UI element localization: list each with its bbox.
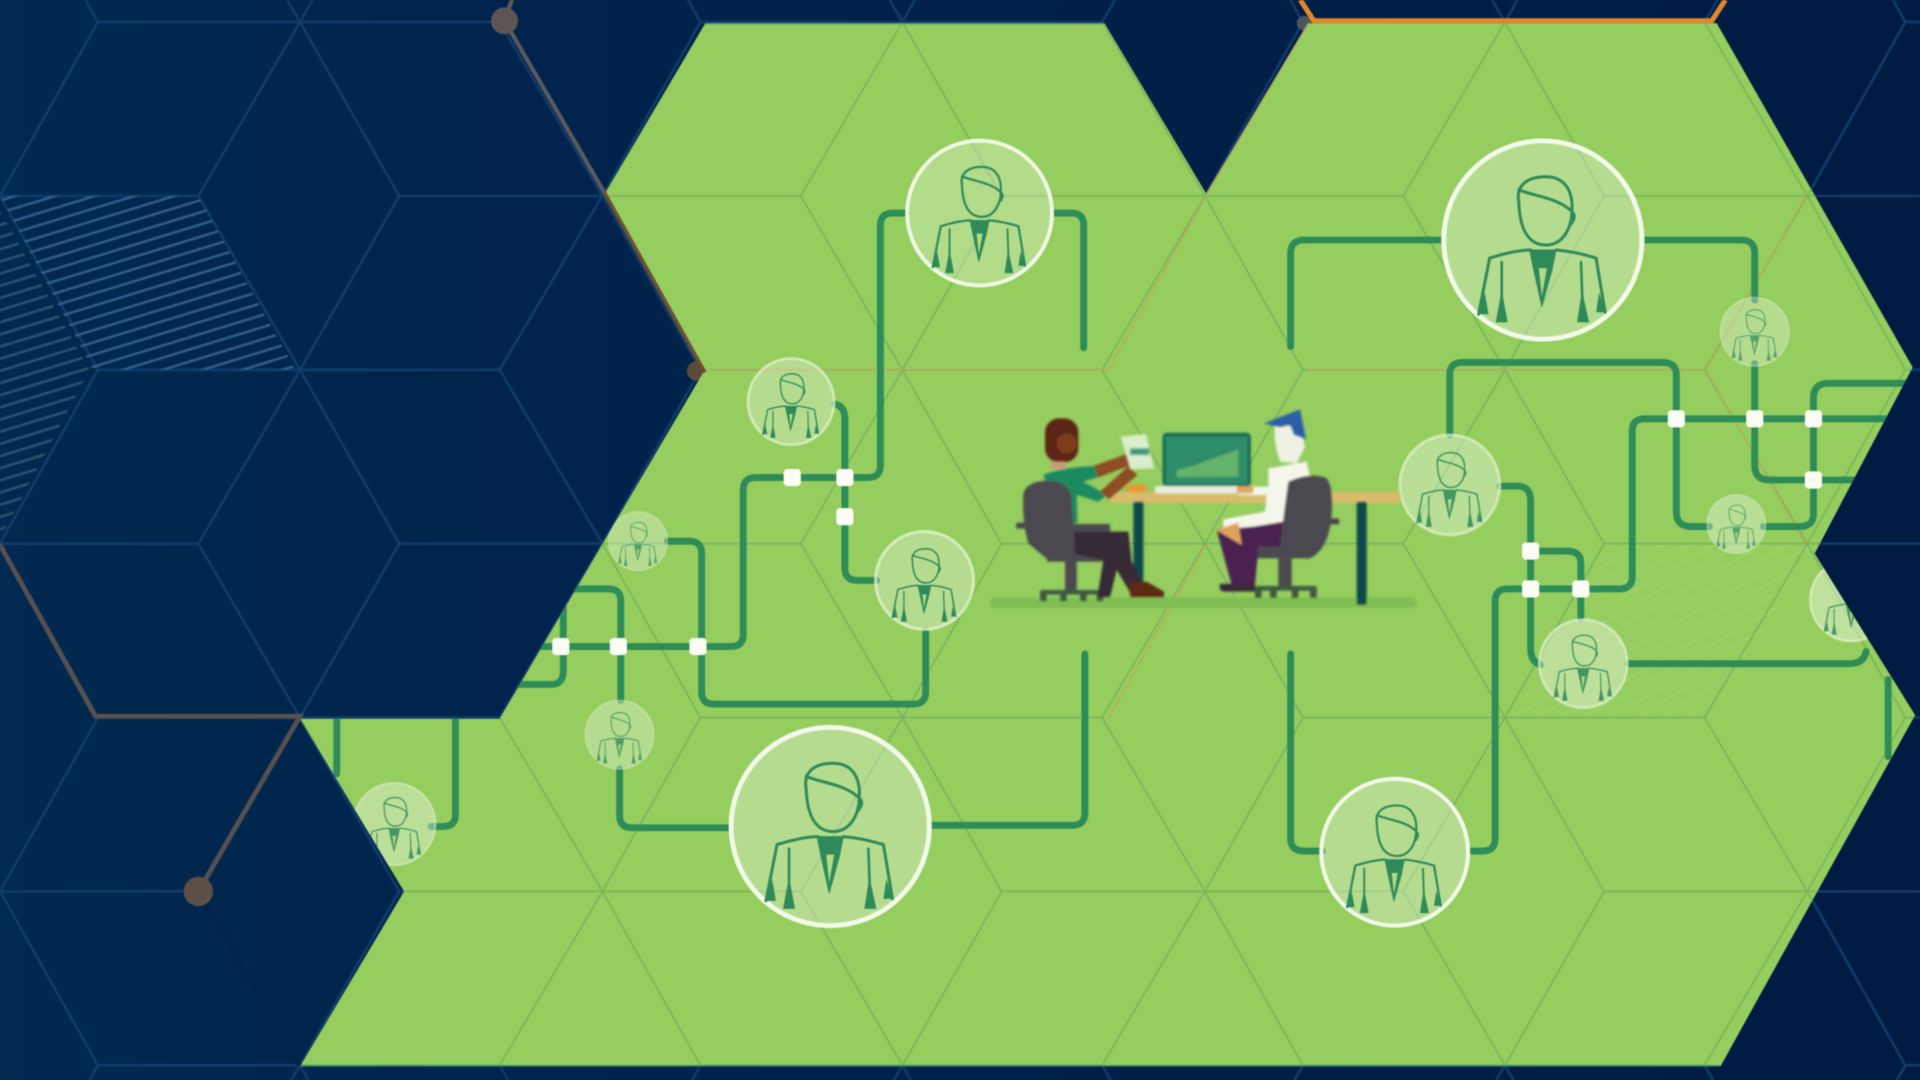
person node: clipped far right	[1808, 568, 1868, 643]
left chair back	[1023, 481, 1075, 562]
left chair base and seat	[1016, 523, 1110, 601]
left person	[1043, 418, 1164, 597]
person node: lower mid right	[1539, 620, 1627, 708]
desk	[1110, 492, 1400, 605]
hatched rhombus panel	[0, 196, 295, 539]
junction squares	[552, 410, 1822, 655]
person node: small upper left	[748, 359, 834, 445]
laptop	[1155, 434, 1249, 493]
person node: small lower left	[585, 700, 654, 769]
gray connector line: upper left	[491, 0, 704, 371]
connector lines	[337, 213, 1916, 851]
person node: large bottom left	[731, 727, 929, 926]
person node: small top right	[1720, 298, 1789, 366]
person node: top left	[907, 141, 1052, 285]
right chair base and seat	[1253, 518, 1339, 598]
person node: mid right	[1400, 435, 1500, 535]
person node: clipped far left	[353, 783, 435, 865]
central scene: two people at a desk	[990, 409, 1417, 608]
gray connector line: lower left	[0, 545, 300, 906]
right person	[1216, 409, 1311, 592]
right chair back	[1280, 476, 1332, 558]
person node: tiny right	[1707, 495, 1766, 553]
circuit lines and people nodes	[337, 141, 1916, 926]
orange bracket top right	[1300, 0, 1725, 21]
person node: bottom right	[1321, 779, 1468, 926]
person node: tiny left	[609, 512, 667, 571]
edge nodes behind the green field	[687, 16, 1311, 381]
person node: mid left	[876, 531, 973, 629]
person node: large top right	[1444, 141, 1642, 339]
ground shadow	[990, 597, 1417, 608]
